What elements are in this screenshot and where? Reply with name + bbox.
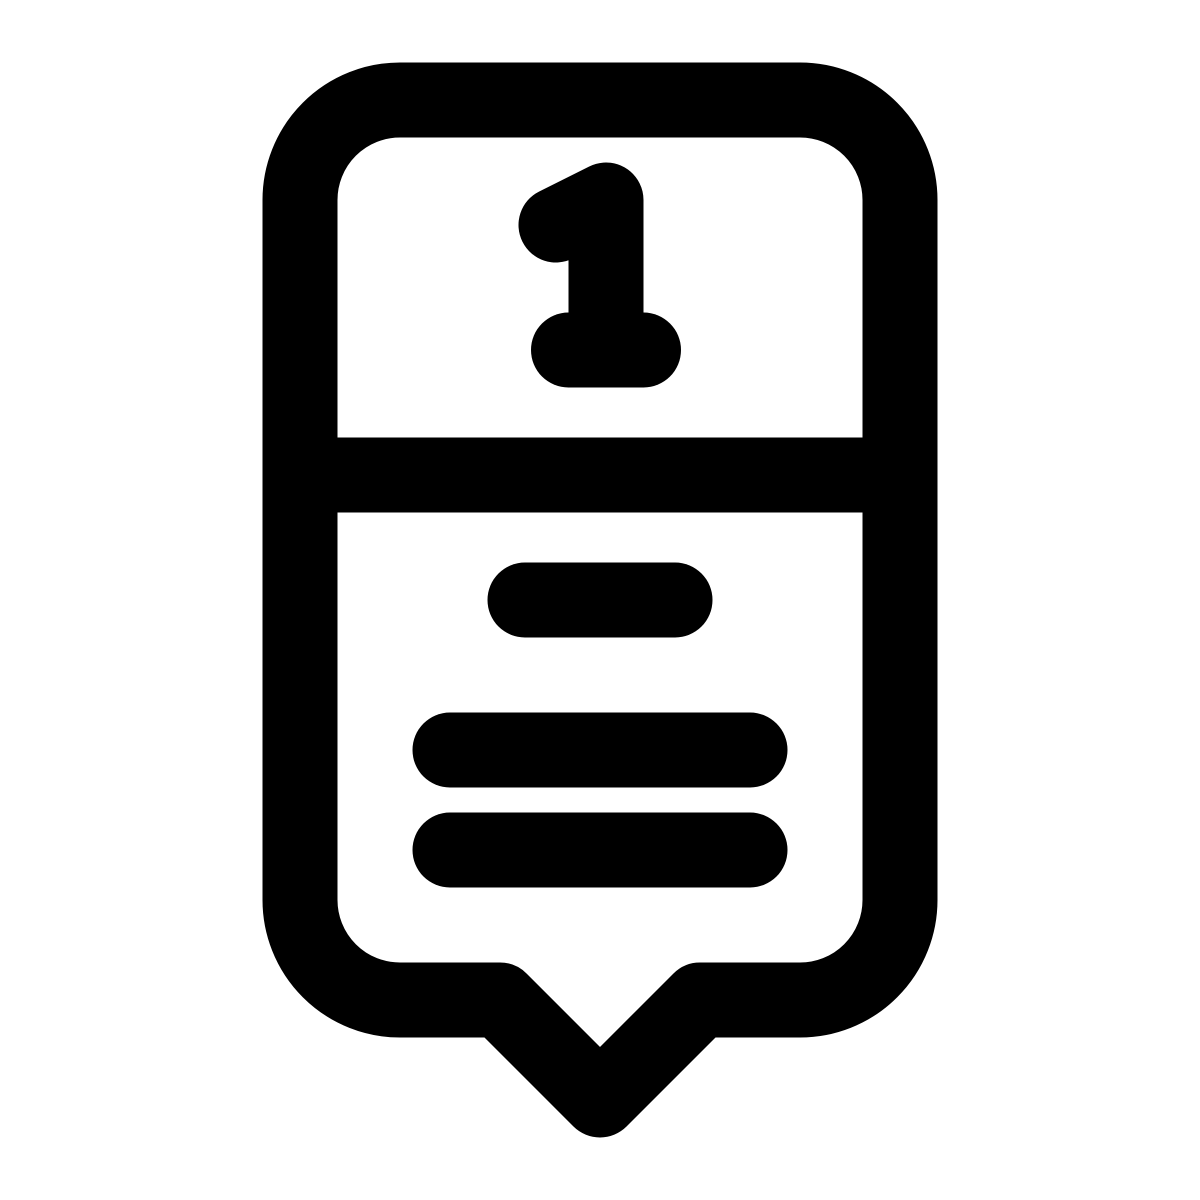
- card outline with bottom pointer: [300, 100, 900, 1100]
- numeral one: [556, 200, 644, 350]
- body text lines: [450, 750, 750, 850]
- heading line: [525, 562, 675, 638]
- header divider: [300, 438, 900, 512]
